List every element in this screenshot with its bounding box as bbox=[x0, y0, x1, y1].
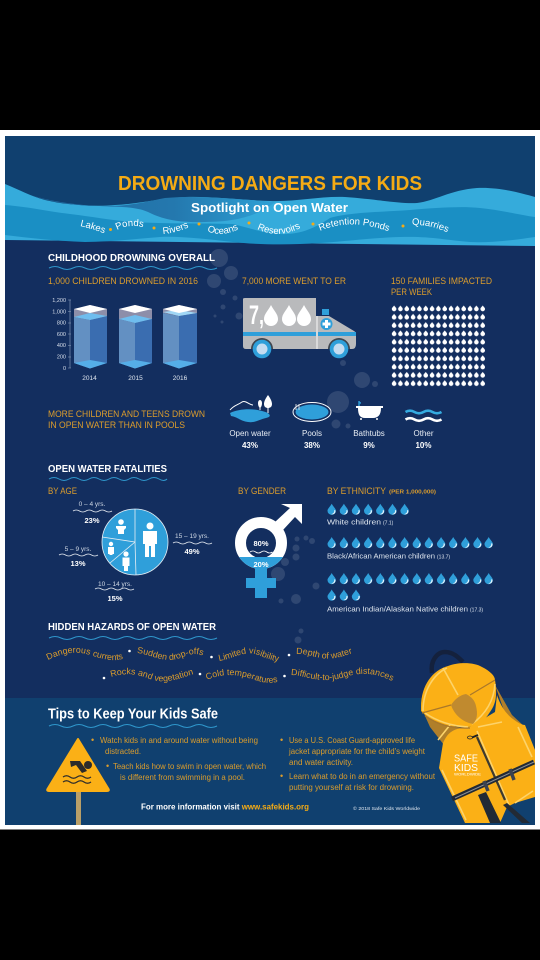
tips: right column: putting yourself at risk for drowning. bbox=[289, 783, 414, 792]
subheading: by gender: BY GENDER bbox=[238, 486, 286, 496]
pictogram: black/african american children bbox=[327, 537, 493, 560]
subheading: by ethnicity: BY ETHNICITY bbox=[327, 486, 386, 496]
subheading: by ethnicity: (PER 1,000,000) bbox=[389, 490, 436, 496]
label: 5-9 years: 13% bbox=[70, 559, 86, 568]
label: 10-14 years bbox=[95, 581, 134, 603]
bar chart: children drowned by year: 600 bbox=[57, 332, 66, 338]
heading: tips bbox=[48, 706, 218, 728]
label: 15-19 years: 15 – 19 yrs. bbox=[175, 533, 209, 540]
hazards list: Limited visibility bbox=[218, 647, 280, 662]
icon: ambulance: 7, bbox=[249, 300, 264, 330]
icon: child figure bbox=[108, 542, 114, 555]
gender symbol chart bbox=[235, 504, 302, 598]
icon: teen figure bbox=[143, 522, 157, 557]
label: 10-14 years: 15% bbox=[107, 594, 123, 603]
tips: right column bbox=[280, 735, 436, 792]
tips: left column bbox=[91, 735, 266, 782]
label: 15-19 years bbox=[173, 533, 212, 556]
pictogram: white children: White children bbox=[327, 518, 381, 526]
tips: left column: • bbox=[106, 761, 109, 771]
bar chart: children drowned by year: 0 bbox=[63, 366, 66, 372]
label: 5-9 years: 5 – 9 yrs. bbox=[65, 546, 92, 553]
pictogram: white children bbox=[327, 504, 409, 526]
percentages: where children drown bbox=[229, 429, 434, 450]
subheading: 1,000 children drowned: 1,000 CHILDREN DROWNED IN 2016 bbox=[48, 276, 198, 286]
icon: pool bbox=[293, 402, 331, 422]
tips: right column: Learn what to do in an emergency without bbox=[289, 772, 436, 781]
icon: baby figure bbox=[116, 519, 126, 534]
percentages: where children drown: Pools bbox=[302, 429, 322, 438]
jacket logo bbox=[454, 754, 481, 776]
jacket logo: SAFE bbox=[454, 752, 478, 764]
callout: open water vs pools: MORE CHILDREN AND TEENS DROWN bbox=[48, 409, 205, 419]
tips: right column: Use a U.S. Coast Guard-approved life bbox=[289, 736, 415, 745]
tips: right column: • bbox=[280, 771, 283, 781]
icon: bathtub bbox=[356, 401, 383, 420]
heading: childhood drowning overall bbox=[48, 253, 217, 270]
hazards list: Dangerous currents bbox=[46, 648, 123, 660]
gender symbol chart: 20% bbox=[253, 560, 269, 569]
icon: warning sign bbox=[47, 739, 109, 825]
callout: open water vs pools bbox=[48, 409, 205, 430]
heading: childhood drowning overall: CHILDHOOD DROWNING OVERALL bbox=[48, 253, 215, 264]
bar chart: children drowned by year: 2015 bbox=[128, 375, 143, 382]
bar chart: children drowned by year: 2014 bbox=[82, 375, 97, 382]
bar 2016 bbox=[163, 305, 197, 368]
water types list: Ponds bbox=[115, 219, 144, 230]
subheading: 150 families impacted bbox=[391, 276, 492, 297]
subheading: 150 families impacted: 150 FAMILIES IMPACTED bbox=[391, 276, 492, 286]
gender symbol chart: 80% bbox=[253, 539, 269, 548]
subtitle: Spotlight on Open Water bbox=[191, 201, 348, 215]
pictogram: american indian/alaskan native children bbox=[327, 573, 493, 614]
water types list: Retention Ponds bbox=[318, 218, 390, 231]
callout: open water vs pools: IN OPEN WATER THAN IN POOLS bbox=[48, 420, 185, 430]
percentages: where children drown: 10% bbox=[415, 441, 432, 450]
page frame bbox=[0, 130, 540, 830]
tips: left column: distracted. bbox=[105, 747, 141, 756]
pictogram: 150 drops bbox=[391, 305, 486, 388]
heading: hidden hazards: HIDDEN HAZARDS OF OPEN WATER bbox=[48, 622, 216, 633]
pictogram: american indian/alaskan native children: (17.3) bbox=[470, 608, 483, 614]
pictogram: white children: (7.1) bbox=[383, 520, 394, 526]
water types list: Reservoirs bbox=[258, 223, 300, 234]
tips: left column: • bbox=[91, 735, 94, 745]
icon: other waves bbox=[406, 411, 442, 421]
jacket logo: KIDS bbox=[454, 762, 478, 774]
label: 15-19 years: 49% bbox=[184, 547, 200, 556]
pictogram: american indian/alaskan native children: American Indian/Alaskan Native children bbox=[327, 604, 468, 614]
hazards list: Cold temperatures bbox=[206, 669, 278, 683]
heading: open water fatalities: OPEN WATER FATALITIES bbox=[48, 464, 167, 475]
water types list: Rivers bbox=[163, 223, 188, 234]
pictogram: black/african american children: Black/African American children bbox=[327, 552, 435, 560]
label: 0-4 years: 0 – 4 yrs. bbox=[79, 501, 106, 508]
icon: ambulance bbox=[243, 298, 356, 358]
percentages: where children drown: Open water bbox=[229, 429, 271, 438]
label: 10-14 years: 10 – 14 yrs. bbox=[98, 581, 132, 588]
tips: right column: jacket appropriate for the child's weight bbox=[288, 747, 426, 756]
subheading: by ethnicity bbox=[327, 486, 436, 496]
water types list bbox=[80, 218, 448, 234]
icon: open water bbox=[230, 395, 272, 422]
hazards list bbox=[46, 647, 394, 683]
bar chart: children drowned by year: 1,000 bbox=[52, 310, 66, 316]
hazards list: Difficult-to-judge distances bbox=[292, 668, 394, 682]
bar chart: children drowned by year: 200 bbox=[57, 354, 66, 360]
water types list: Lakes bbox=[80, 220, 106, 233]
bar 2014 bbox=[74, 305, 107, 368]
footer: more information: For more information visit www.safekids.org bbox=[141, 802, 309, 812]
jacket logo: WORLDWIDE bbox=[454, 772, 482, 776]
label: 0-4 years bbox=[73, 501, 112, 525]
tips: right column: and water activity. bbox=[289, 758, 353, 767]
subheading: 150 families impacted: PER WEEK bbox=[391, 287, 432, 297]
bar chart: children drowned by year: 1,200 bbox=[52, 298, 66, 304]
water types list: Quarries bbox=[412, 218, 448, 232]
percentages: where children drown: Other bbox=[413, 429, 434, 438]
pictogram: black/african american children: (13.7) bbox=[437, 554, 450, 560]
header waves bbox=[5, 184, 535, 246]
hazards list: Sudden drop-offs bbox=[138, 647, 204, 660]
icon: older child figure bbox=[122, 551, 130, 571]
pie labels bbox=[59, 501, 212, 603]
subheading: 7,000 more went to ER: 7,000 MORE WENT TO ER bbox=[242, 276, 346, 286]
title: DROWNING DANGERS FOR KIDS bbox=[118, 173, 422, 195]
heading: open water fatalities bbox=[48, 464, 167, 480]
bar 2015 bbox=[119, 305, 152, 368]
bar chart: children drowned by year bbox=[52, 298, 197, 382]
heading: tips: Tips to Keep Your Kids Safe bbox=[48, 706, 218, 722]
percentages: where children drown: 38% bbox=[304, 441, 320, 450]
bar chart: children drowned by year: 2016 bbox=[173, 375, 188, 382]
copyright: © 2018 Safe Kids Worldwide bbox=[353, 805, 420, 812]
tips: left column: Watch kids in and around water without being bbox=[100, 736, 258, 745]
label: 0-4 years: 23% bbox=[84, 516, 100, 525]
icon: life jacket bbox=[421, 652, 535, 823]
heading: hidden hazards bbox=[48, 622, 217, 640]
bar chart: children drowned by year: 800 bbox=[57, 320, 66, 326]
tips: right column: • bbox=[280, 735, 283, 745]
pie chart: by age bbox=[102, 509, 168, 575]
percentages: where children drown: 9% bbox=[363, 441, 375, 450]
tips: left column: Teach kids how to swim in open water, which bbox=[113, 762, 266, 771]
background bubbles bbox=[207, 249, 378, 644]
percentages: where children drown: 43% bbox=[242, 441, 258, 450]
water types list: Oceans bbox=[208, 225, 238, 234]
percentages: where children drown: Bathtubs bbox=[353, 429, 385, 438]
bar chart: children drowned by year: 400 bbox=[57, 343, 66, 349]
label: 5-9 years bbox=[59, 546, 98, 568]
hazards list: Depth of water bbox=[296, 648, 352, 659]
subheading: by age: BY AGE bbox=[48, 486, 77, 496]
hazards list: Rocks and vegetation bbox=[110, 668, 194, 683]
tips: left column: is different from swimming in a pool. bbox=[120, 773, 245, 782]
